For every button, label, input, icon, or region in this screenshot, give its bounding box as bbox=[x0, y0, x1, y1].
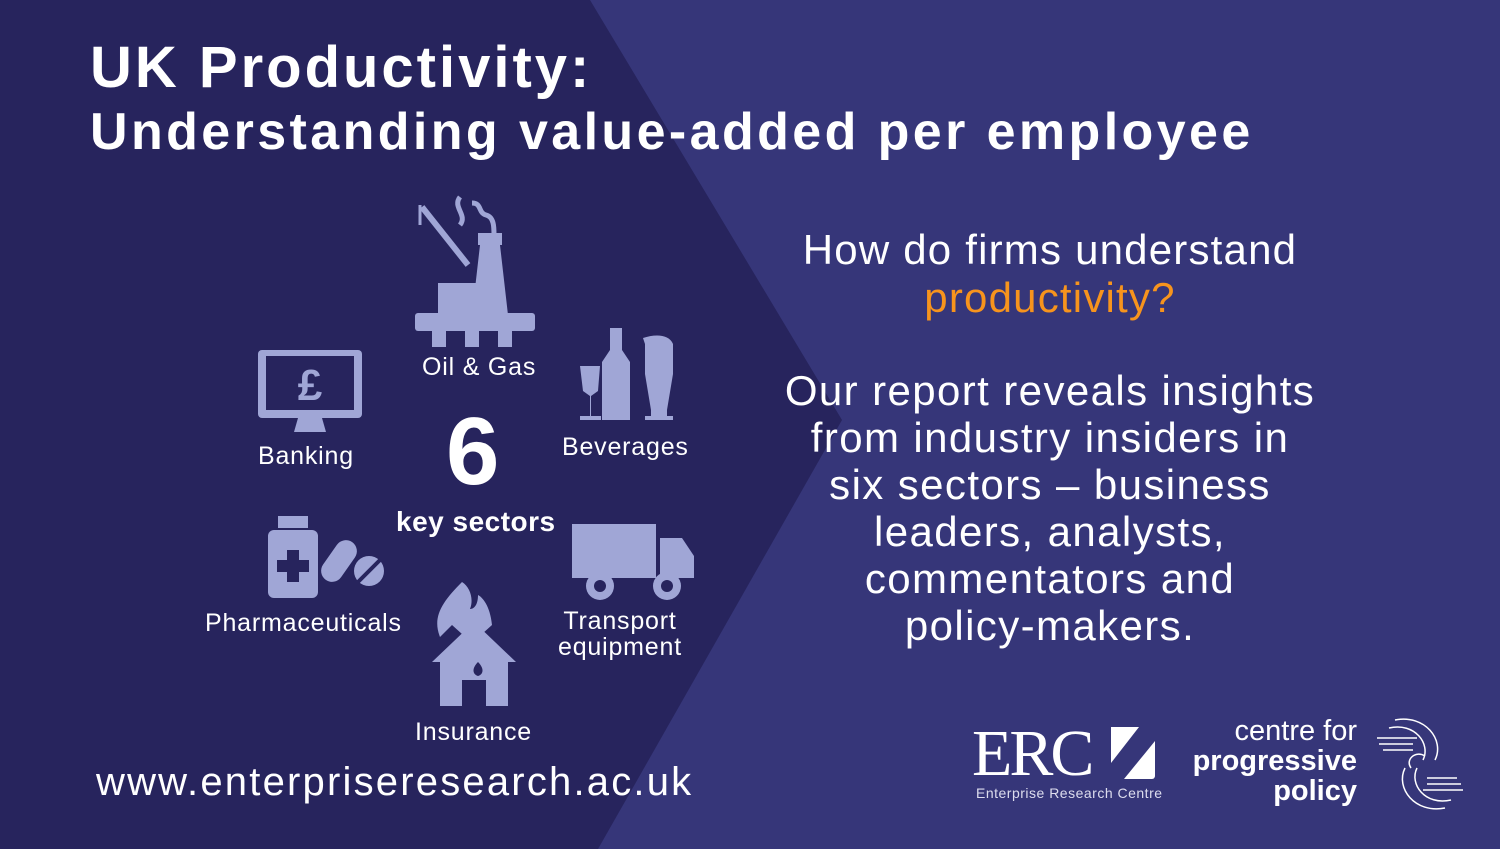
report text bbox=[785, 367, 1315, 649]
question text: productivity? bbox=[924, 274, 1176, 321]
report text: Our report reveals insights bbox=[785, 367, 1315, 414]
label: banking: Banking bbox=[258, 442, 354, 470]
logo: centre for progressive policy bbox=[1193, 715, 1463, 810]
logo: centre for progressive policy: policy bbox=[1273, 775, 1357, 807]
icon: insurance house fire bbox=[432, 582, 516, 706]
title: UK Productivity: bbox=[90, 35, 592, 100]
icon: banking monitor bbox=[258, 350, 362, 432]
title bbox=[90, 35, 1254, 161]
report text: commentators and bbox=[865, 555, 1235, 602]
label: beverages: Beverages bbox=[562, 433, 689, 461]
label: insurance: Insurance bbox=[415, 718, 532, 746]
label: pharmaceuticals: Pharmaceuticals bbox=[205, 609, 402, 637]
sector diagram bbox=[205, 196, 694, 746]
question text bbox=[803, 226, 1297, 321]
icon: banking monitor: £ bbox=[298, 361, 323, 410]
label: transport equipment: Transport bbox=[563, 607, 677, 635]
label: oil & gas: Oil & Gas bbox=[422, 353, 536, 381]
icon: truck bbox=[572, 524, 694, 600]
label: transport equipment bbox=[558, 607, 682, 661]
logo: ERC: Enterprise Research Centre bbox=[976, 785, 1163, 801]
report text: from industry insiders in bbox=[811, 414, 1289, 461]
icon: oil rig bbox=[415, 196, 535, 347]
title: Understanding value-added per employee bbox=[90, 103, 1254, 161]
icon: pharmaceuticals bbox=[268, 516, 384, 598]
logo: ERC: ERC bbox=[972, 717, 1091, 790]
logo: centre for progressive policy: progressive bbox=[1193, 745, 1357, 777]
label: transport equipment: equipment bbox=[558, 633, 682, 661]
sector diagram: key sectors bbox=[396, 506, 556, 537]
report text: policy-makers. bbox=[905, 602, 1195, 649]
number: 6 key sectors: 6 bbox=[446, 398, 499, 505]
report text: six sectors – business bbox=[829, 461, 1271, 508]
website url: www.enterpriseresearch.ac.uk bbox=[96, 760, 693, 804]
logo: centre for progressive policy: centre for bbox=[1234, 715, 1357, 747]
icon: beverages bbox=[580, 328, 673, 420]
report text: leaders, analysts, bbox=[874, 508, 1226, 555]
question text: How do firms understand bbox=[803, 226, 1297, 273]
logo: ERC bbox=[972, 717, 1163, 801]
